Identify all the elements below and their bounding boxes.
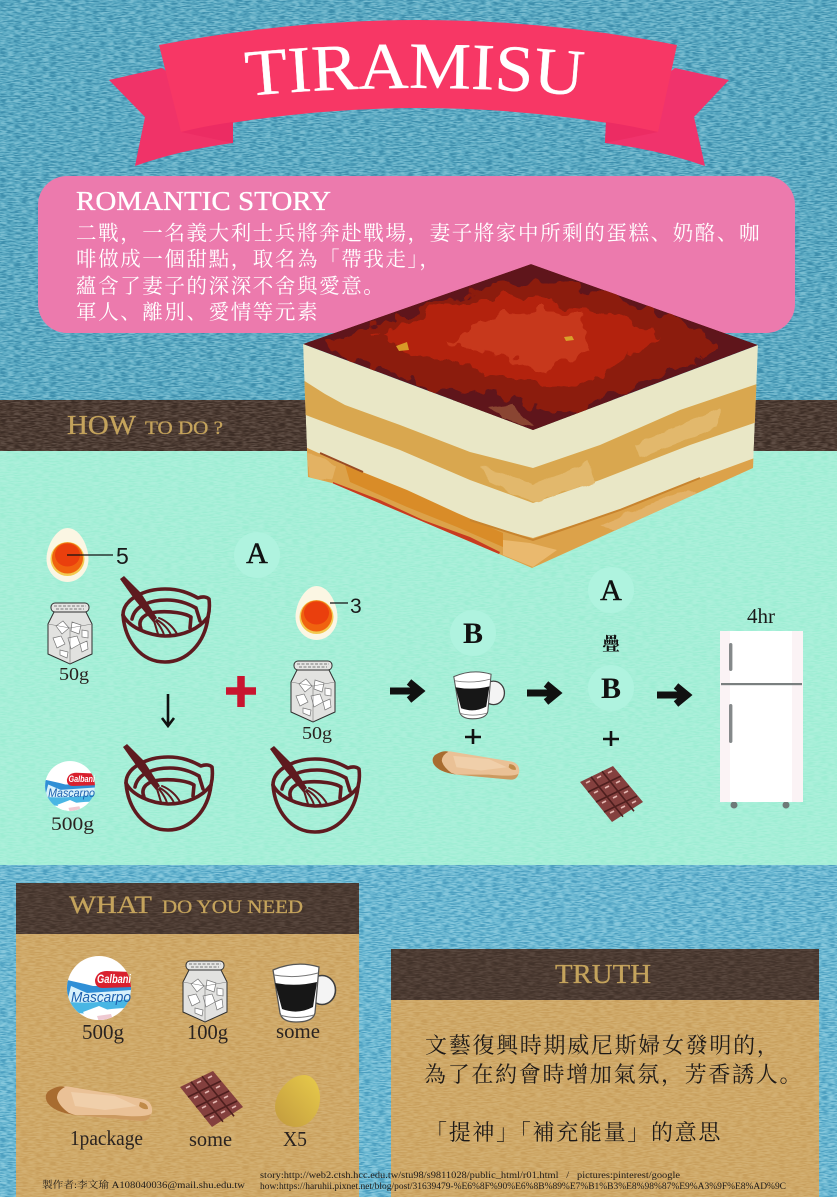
how to do heading band bbox=[0, 400, 837, 451]
step: mascarpone 500g: 500g bbox=[51, 814, 95, 835]
icon: whisk bowl 3 bbox=[270, 746, 359, 832]
background: lower blue wall bbox=[0, 865, 837, 1197]
panel: truth background bbox=[391, 949, 819, 1197]
label: chill time: 4hr bbox=[747, 604, 775, 628]
label: mixture A bbox=[234, 532, 280, 578]
story text: 蘊含了妻子的深深不舍與愛意。 bbox=[76, 275, 385, 298]
story heading: ROMANTIC STORY bbox=[76, 186, 331, 216]
step: sugar jar 50g: 50g bbox=[59, 664, 89, 684]
label: mixture A: A bbox=[246, 537, 268, 570]
step: egg with count 5 bbox=[46, 528, 129, 582]
step: sugar jar second 50g: 50g bbox=[302, 723, 332, 743]
how to do heading: TO DO ? bbox=[145, 418, 223, 439]
step: egg with count 5: 5 bbox=[116, 543, 129, 569]
sources bbox=[260, 1170, 786, 1192]
arrow: to mixture B bbox=[390, 682, 420, 700]
plus sign bbox=[465, 729, 481, 744]
step: mascarpone 500g: Mascarpo bbox=[48, 787, 95, 800]
icon: coffee cup bbox=[454, 672, 504, 719]
ingredient: mascarpone: Mascarpo bbox=[71, 989, 131, 1006]
label: layer character: 疊 bbox=[602, 634, 620, 654]
step: sugar jar 50g bbox=[48, 603, 92, 684]
sources: story:http://web2.ctsh.hcc.edu.tw/stu98/s9811028/public_html/r01.html / pictures:pinterest/google bbox=[260, 1170, 680, 1181]
arrow: down bbox=[162, 694, 174, 726]
arrow: to fridge bbox=[657, 686, 687, 704]
ingredient: sugar jar bbox=[183, 961, 228, 1044]
panel: romantic story bbox=[38, 176, 795, 333]
step: egg with count 3 bbox=[296, 586, 362, 640]
credit: 製作者:李文瑜 A108040036@mail.shu.edu.tw bbox=[42, 1179, 245, 1191]
cake sides bbox=[303, 344, 760, 572]
icon: ladyfinger biscuit bbox=[433, 751, 519, 780]
truth text: 為了在約會時增加氣氛，芳香誘人。 bbox=[424, 1062, 803, 1088]
story text bbox=[76, 222, 761, 324]
ingredient: sugar jar: 100g bbox=[187, 1020, 228, 1044]
ingredient: chocolate bbox=[180, 1071, 243, 1151]
ribbon left tail bbox=[109, 68, 233, 166]
what do you need heading: DO YOU NEED bbox=[162, 898, 303, 918]
plus sign two bbox=[603, 731, 619, 746]
ingredient: mascarpone: Galbani bbox=[97, 972, 132, 986]
truth text: 文藝復興時期威尼斯婦女發明的， bbox=[425, 1033, 781, 1059]
step: mascarpone 500g: Galbani bbox=[68, 774, 95, 784]
icon: red plus bbox=[226, 676, 256, 707]
label: mixture B bbox=[450, 610, 496, 656]
ingredient: ladyfinger: 1package bbox=[70, 1126, 143, 1150]
lower biscuit layer bbox=[303, 446, 760, 572]
ribbon right tail bbox=[605, 68, 729, 166]
ingredient: coffee bbox=[273, 964, 336, 1043]
icon: whisk bowl 2 bbox=[123, 744, 212, 830]
arrow: to layering bbox=[527, 684, 557, 702]
ingredient: coffee: some bbox=[276, 1019, 320, 1043]
ingredient: chocolate: some bbox=[189, 1127, 232, 1151]
truth text bbox=[424, 1033, 803, 1145]
ingredient: ladyfinger bbox=[46, 1086, 152, 1150]
illustration: tiramisu cake bbox=[303, 264, 760, 572]
ribbon main band bbox=[159, 20, 677, 132]
label: layer B bbox=[588, 665, 634, 711]
ingredient: eggs bbox=[275, 1075, 320, 1151]
upper biscuit layer bbox=[303, 380, 760, 503]
what do you need heading bbox=[69, 892, 303, 919]
how to do heading bbox=[67, 410, 223, 440]
step: mascarpone 500g bbox=[45, 761, 95, 835]
what do you need heading: WHAT bbox=[69, 892, 152, 919]
label: layer A bbox=[588, 567, 634, 613]
icon: whisk bowl 1 bbox=[120, 576, 209, 662]
step: egg with count 3: 3 bbox=[350, 595, 362, 618]
sources: how:https://haruhii.pixnet.net/blog/post/31639479-%E6%8F%90%E6%8B%89%E7%B1%B3%E8%98%87%E9%A3%9F%E8%AD%9C bbox=[260, 1181, 786, 1192]
title ribbon bbox=[109, 20, 729, 166]
background: mint table band bbox=[0, 451, 837, 865]
icon: chocolate bar bbox=[580, 766, 643, 822]
story text: 啡做成一個甜點，取名為「帶我走」， bbox=[76, 248, 441, 271]
cake top with cocoa bbox=[303, 264, 758, 430]
truth text: 「提神」「補充能量」的意思 bbox=[425, 1120, 722, 1145]
ingredient: mascarpone: 500g bbox=[82, 1020, 124, 1044]
title text: TIRAMISU bbox=[244, 44, 584, 96]
ribbon folds bbox=[181, 122, 658, 143]
story text: 二戰，一名義大利士兵將奔赴戰場，妻子將家中所剩的蛋糕、奶酪、咖 bbox=[76, 222, 761, 245]
panel: what do you need background bbox=[16, 883, 359, 1197]
ingredient: mascarpone bbox=[67, 956, 132, 1044]
ingredient: eggs: X5 bbox=[283, 1127, 307, 1151]
step: sugar jar second 50g bbox=[291, 661, 335, 743]
label: mixture B: B bbox=[463, 617, 483, 650]
label: layer B: B bbox=[601, 672, 621, 705]
truth heading: TRUTH bbox=[555, 959, 651, 989]
story text: 軍人、離別、愛情等元素 bbox=[76, 301, 319, 324]
how to do heading: HOW bbox=[67, 410, 137, 440]
background: blue upper wall bbox=[0, 0, 837, 400]
label: layer A: A bbox=[600, 574, 622, 607]
icon: fridge bbox=[720, 631, 803, 808]
